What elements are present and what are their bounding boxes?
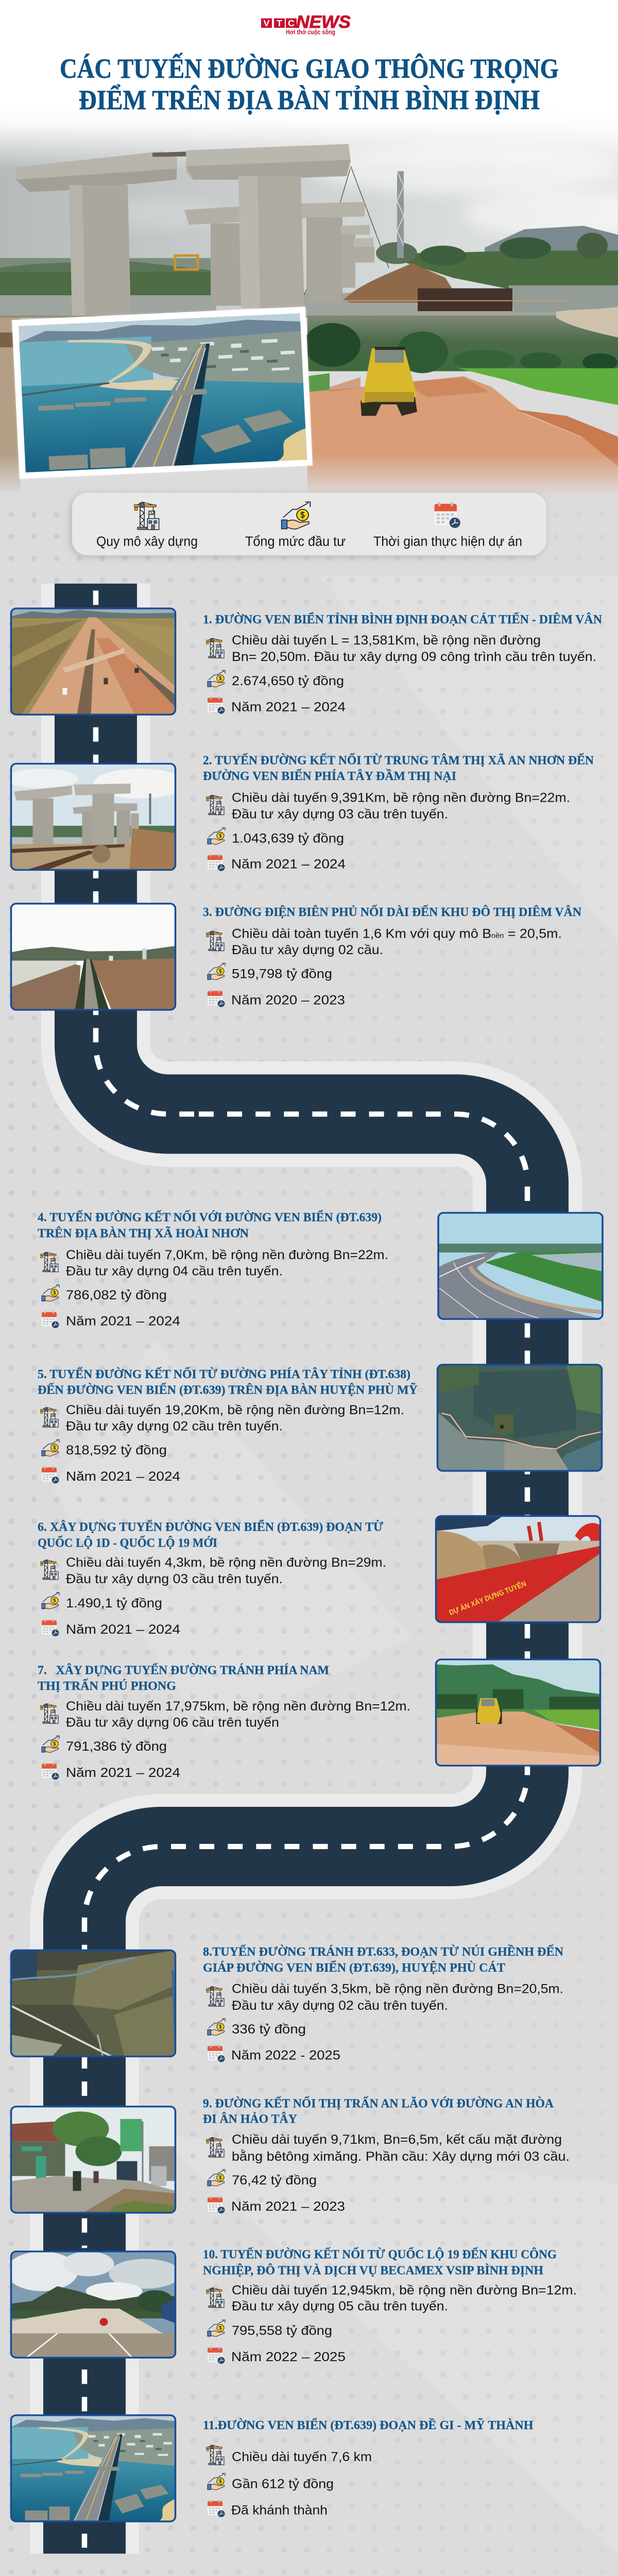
heading 10: 10. TUYẾN ĐƯỜNG KẾT NỐI TỪ QUỐC LỘ 19 ĐẾN KHU CÔNG [203, 2247, 557, 2261]
icon: scale [40, 1408, 58, 1427]
heading 8: 8.TUYẾN ĐƯỜNG TRÁNH ĐT.633, ĐOẠN TỪ NÚI GHỀNH ĐẾN [203, 1944, 563, 1959]
scale text: Chiều dài tuyến L = 13,581Km, bề rộng nền đường [232, 634, 541, 648]
icon: investment [208, 828, 225, 844]
scale text: Đầu tư xây dựng 06 cầu trên tuyến [66, 1716, 279, 1730]
project 7 [38, 1659, 600, 1780]
photo 10 [6, 2251, 181, 2358]
heading 6 [38, 1519, 383, 1550]
legend label: schedule: Thời gian thực hiện dự án [373, 534, 522, 549]
scale text: Chiều dài tuyến 4,3km, bề rộng nền đường Bn=29m. [66, 1555, 386, 1570]
winding road [84, 584, 527, 2554]
heading 5 [38, 1366, 418, 1397]
logo: VTC News: C [288, 18, 295, 28]
investment text: 76,42 tỷ đồng [232, 2173, 317, 2188]
heading 6: QUỐC LỘ 1D - QUỐC LỘ 19 MỚI [38, 1535, 217, 1550]
heading 7: 7. XÂY DỰNG TUYẾN ĐƯỜNG TRÁNH PHÍA NAM [38, 1663, 329, 1677]
heading 7: THỊ TRẤN PHÚ PHONG [38, 1679, 176, 1693]
icon: scale [40, 1704, 58, 1723]
schedule text: Đã khánh thành [231, 2503, 328, 2517]
schedule text: Năm 2021 – 2024 [231, 700, 346, 714]
heading 5: ĐẾN ĐƯỜNG VEN BIỂN (ĐT.639) TRÊN ĐỊA BÀN HUYỆN PHÙ MỸ [38, 1382, 418, 1397]
icon: schedule [208, 2196, 225, 2214]
scale text: Đầu tư xây dựng 02 cầu trên tuyến. [232, 1998, 448, 2013]
icon: investment [208, 2170, 225, 2186]
icon: schedule [42, 1466, 59, 1484]
photo 6 [436, 1516, 600, 1622]
legend label: investment: Tổng mức đầu tư [245, 534, 346, 549]
icon: schedule [42, 1762, 59, 1780]
logo: VTC News [261, 12, 351, 36]
heading 9: ĐI ÂN HẢO TÂY [203, 2112, 297, 2126]
project 2 [6, 753, 594, 871]
icon: schedule [208, 2500, 225, 2517]
scale text: Chiều dài tuyến 9,71km, Bn=6,5m, kết cấu mặt đường [232, 2132, 562, 2147]
scale text: Chiều dài toàn tuyến 1,6 Km với quy mô B nền = 20,5m. [232, 927, 562, 941]
photo 2 [6, 764, 186, 870]
photo 11 [11, 2415, 176, 2521]
project 1 [11, 608, 602, 715]
scale text: Đầu tư xây dựng 04 cầu trên tuyến. [66, 1264, 283, 1278]
icon: investment [208, 2320, 225, 2336]
icon: scale [206, 2287, 224, 2308]
scale text [66, 1555, 386, 1586]
scale text: Đầu tư xây dựng 05 cầu trên tuyến. [232, 2299, 448, 2314]
scale text: bằng bêtông ximăng. Phần cầu: Xây dựng mới 03 cầu. [232, 2149, 570, 2164]
heading 10: NGHIỆP, ĐÔ THỊ VÀ DỊCH VỤ BECAMEX VSIP BÌNH ĐỊNH [203, 2263, 544, 2277]
scale text: Chiều dài tuyến 7,0Km, bề rộng nền đường Bn=22m. [66, 1248, 388, 1262]
icon: investment [42, 1592, 59, 1609]
scale text: Chiều dài tuyến 7,6 km [232, 2450, 372, 2464]
heading 11: 11.ĐƯỜNG VEN BIỂN (ĐT.639) ĐOẠN ĐỀ GI - MỸ THÀNH [203, 2417, 534, 2432]
icon: investment [208, 2473, 225, 2490]
legend panel [72, 493, 546, 555]
heading 8 [203, 1944, 563, 1975]
scale text: Chiều dài tuyến 3,5km, bề rộng nền đường Bn=20,5m. [232, 1982, 563, 1996]
investment text: 1.490,1 tỷ đồng [66, 1596, 162, 1611]
scale text [232, 927, 562, 957]
project 9 [11, 2096, 570, 2214]
schedule text: Năm 2021 – 2024 [66, 1622, 180, 1637]
investment text: 786,082 tỷ đồng [66, 1289, 167, 1302]
investment text: 795,558 tỷ đồng [232, 2324, 332, 2338]
icon: scale [40, 1560, 58, 1580]
schedule text: Năm 2021 – 2024 [66, 1766, 180, 1780]
investment text: 336 tỷ đồng [232, 2023, 306, 2037]
scale text: Chiều dài tuyến 19,20Km, bề rộng nền đường Bn=12m. [66, 1403, 404, 1417]
photo 6: DỰ ÁN XÂY DỰNG TUYẾN [448, 1579, 527, 1617]
heading 2: 2. TUYẾN ĐƯỜNG KẾT NỐI TỪ TRUNG TÂM THỊ XÃ AN NHƠN ĐẾN [203, 753, 594, 767]
icon: investment [42, 1439, 59, 1456]
photo 4 [438, 1213, 603, 1319]
project 6 [38, 1516, 600, 1637]
heading 9: 9. ĐƯỜNG KẾT NỐI THỊ TRẤN AN LÃO VỚI ĐƯỜNG AN HÒA [203, 2096, 554, 2111]
logo: VTC News: Hơi thở cuộc sống [286, 28, 335, 36]
schedule text: Năm 2021 – 2024 [66, 1314, 180, 1329]
icon: investment [42, 1285, 59, 1301]
project 10 [6, 2247, 577, 2364]
heading 2 [203, 753, 594, 783]
icon: schedule [208, 2347, 225, 2364]
icon: schedule [208, 2045, 225, 2062]
heading 6: 6. XÂY DỰNG TUYẾN ĐƯỜNG VEN BIỂN (ĐT.639) ĐOẠN TỪ [38, 1519, 383, 1534]
icon: investment [208, 2019, 225, 2035]
icon: schedule [435, 502, 460, 529]
investment text: 519,798 tỷ đồng [232, 967, 332, 981]
icon: construction scale [134, 502, 159, 530]
icon: scale [206, 638, 224, 658]
icon: scale [40, 1252, 58, 1272]
icon: investment [208, 963, 225, 980]
schedule text: Năm 2021 – 2024 [231, 857, 346, 871]
photo 9 [11, 2107, 176, 2213]
scale text [232, 2132, 570, 2164]
title: ĐIỂM TRÊN ĐỊA BÀN TỈNH BÌNH ĐỊNH [79, 84, 540, 115]
heading 2: ĐƯỜNG VEN BIỂN PHÍA TÂY ĐẦM THỊ NẠI [203, 769, 456, 783]
heading 3: 3. ĐƯỜNG ĐIỆN BIÊN PHỦ NỐI DÀI ĐẾN KHU ĐÔ THỊ DIÊM VÂN [203, 905, 581, 919]
project 4 [38, 1210, 603, 1329]
scale text: Đầu tư xây dựng 02 cầu. [232, 943, 383, 957]
heading 7 [38, 1663, 329, 1693]
heading 4: 4. TUYẾN ĐƯỜNG KẾT NỐI VỚI ĐƯỜNG VEN BIỂN (ĐT.639) [38, 1210, 382, 1224]
heading 1: 1. ĐƯỜNG VEN BIỂN TỈNH BÌNH ĐỊNH ĐOẠN CÁT TIẾN - DIÊM VÂN [203, 612, 602, 626]
photo 1 [11, 608, 176, 715]
legend label: scale: Quy mô xây dựng [96, 534, 198, 549]
investment text: 791,386 tỷ đồng [66, 1740, 167, 1754]
scale text: Chiều dài tuyến 9,391Km, bề rộng nền đường Bn=22m. [232, 791, 570, 805]
icon: scale [206, 931, 224, 951]
schedule text: Năm 2022 - 2025 [231, 2048, 340, 2062]
photo 7 [436, 1659, 600, 1766]
icon: investment [42, 1736, 59, 1752]
investment text: 818,592 tỷ đồng [66, 1444, 167, 1458]
scale text [66, 1403, 404, 1433]
heading 4: TRÊN ĐỊA BÀN THỊ XÃ HOÀI NHƠN [38, 1226, 249, 1240]
project 8 [11, 1944, 563, 2062]
icon: schedule [42, 1311, 59, 1329]
icon: investment [208, 670, 225, 687]
scale text [66, 1248, 388, 1278]
schedule text: Năm 2022 – 2025 [231, 2350, 346, 2364]
icon: schedule [208, 854, 225, 871]
schedule text: Năm 2020 – 2023 [231, 993, 345, 1007]
icon: schedule [42, 1619, 59, 1637]
scale text: Bn= 20,50m. Đầu tư xây dựng 09 công trình cầu trên tuyến. [232, 650, 596, 664]
heading 10 [203, 2247, 557, 2277]
icon: scale [206, 2445, 224, 2465]
title [60, 53, 559, 115]
scale text [232, 2283, 577, 2314]
hero photo collage [0, 108, 618, 496]
investment text: 1.043,639 tỷ đồng [232, 832, 344, 845]
scale text [232, 1982, 563, 2013]
project 5 [38, 1365, 603, 1484]
logo: VTC News: T [277, 18, 282, 28]
icon: scale [206, 795, 224, 815]
scale text: Chiều dài tuyến 12,945km, bề rộng nền đường Bn=12m. [232, 2283, 577, 2297]
project 11 [11, 2415, 534, 2521]
investment text: Gần 612 tỷ đồng [232, 2477, 334, 2491]
icon: schedule [208, 990, 225, 1007]
heading 9 [203, 2096, 554, 2126]
logo: VTC News: V [264, 18, 270, 28]
icon: investment [282, 502, 310, 529]
scale text [232, 791, 570, 821]
scale text: Đầu tư xây dựng 02 cầu trên tuyến. [66, 1419, 283, 1433]
scale text: Chiều dài tuyến 17,975km, bề rộng nền đường Bn=12m. [66, 1700, 410, 1714]
logo: VTC News: NEWS [296, 12, 351, 32]
icon: scale [206, 2138, 224, 2157]
scale text: Đầu tư xây dựng 03 cầu trên tuyến. [232, 807, 448, 821]
heading 5: 5. TUYẾN ĐƯỜNG KẾT NỐI TỪ ĐƯỜNG PHÍA TÂY TỈNH (ĐT.638) [38, 1366, 410, 1381]
icon: schedule [208, 697, 225, 714]
scale text [232, 634, 596, 664]
scale text [66, 1700, 410, 1730]
investment text: 2.674,650 tỷ đồng [232, 674, 344, 688]
inset photo: coastal bridge [12, 307, 313, 479]
heading 4 [38, 1210, 382, 1240]
photo 8 [11, 1950, 176, 2057]
project 3 [11, 904, 581, 1010]
icon: scale [206, 1987, 224, 2006]
photo 5 [438, 1365, 603, 1471]
photo 3 [11, 904, 176, 1010]
heading 8: GIÁP ĐƯỜNG VEN BIỂN (ĐT.639), HUYỆN PHÙ CÁT [203, 1960, 505, 1975]
schedule text: Năm 2021 – 2024 [66, 1470, 180, 1484]
scale text: Đầu tư xây dựng 03 cầu trên tuyến. [66, 1572, 283, 1586]
schedule text: Năm 2021 – 2023 [231, 2199, 345, 2214]
